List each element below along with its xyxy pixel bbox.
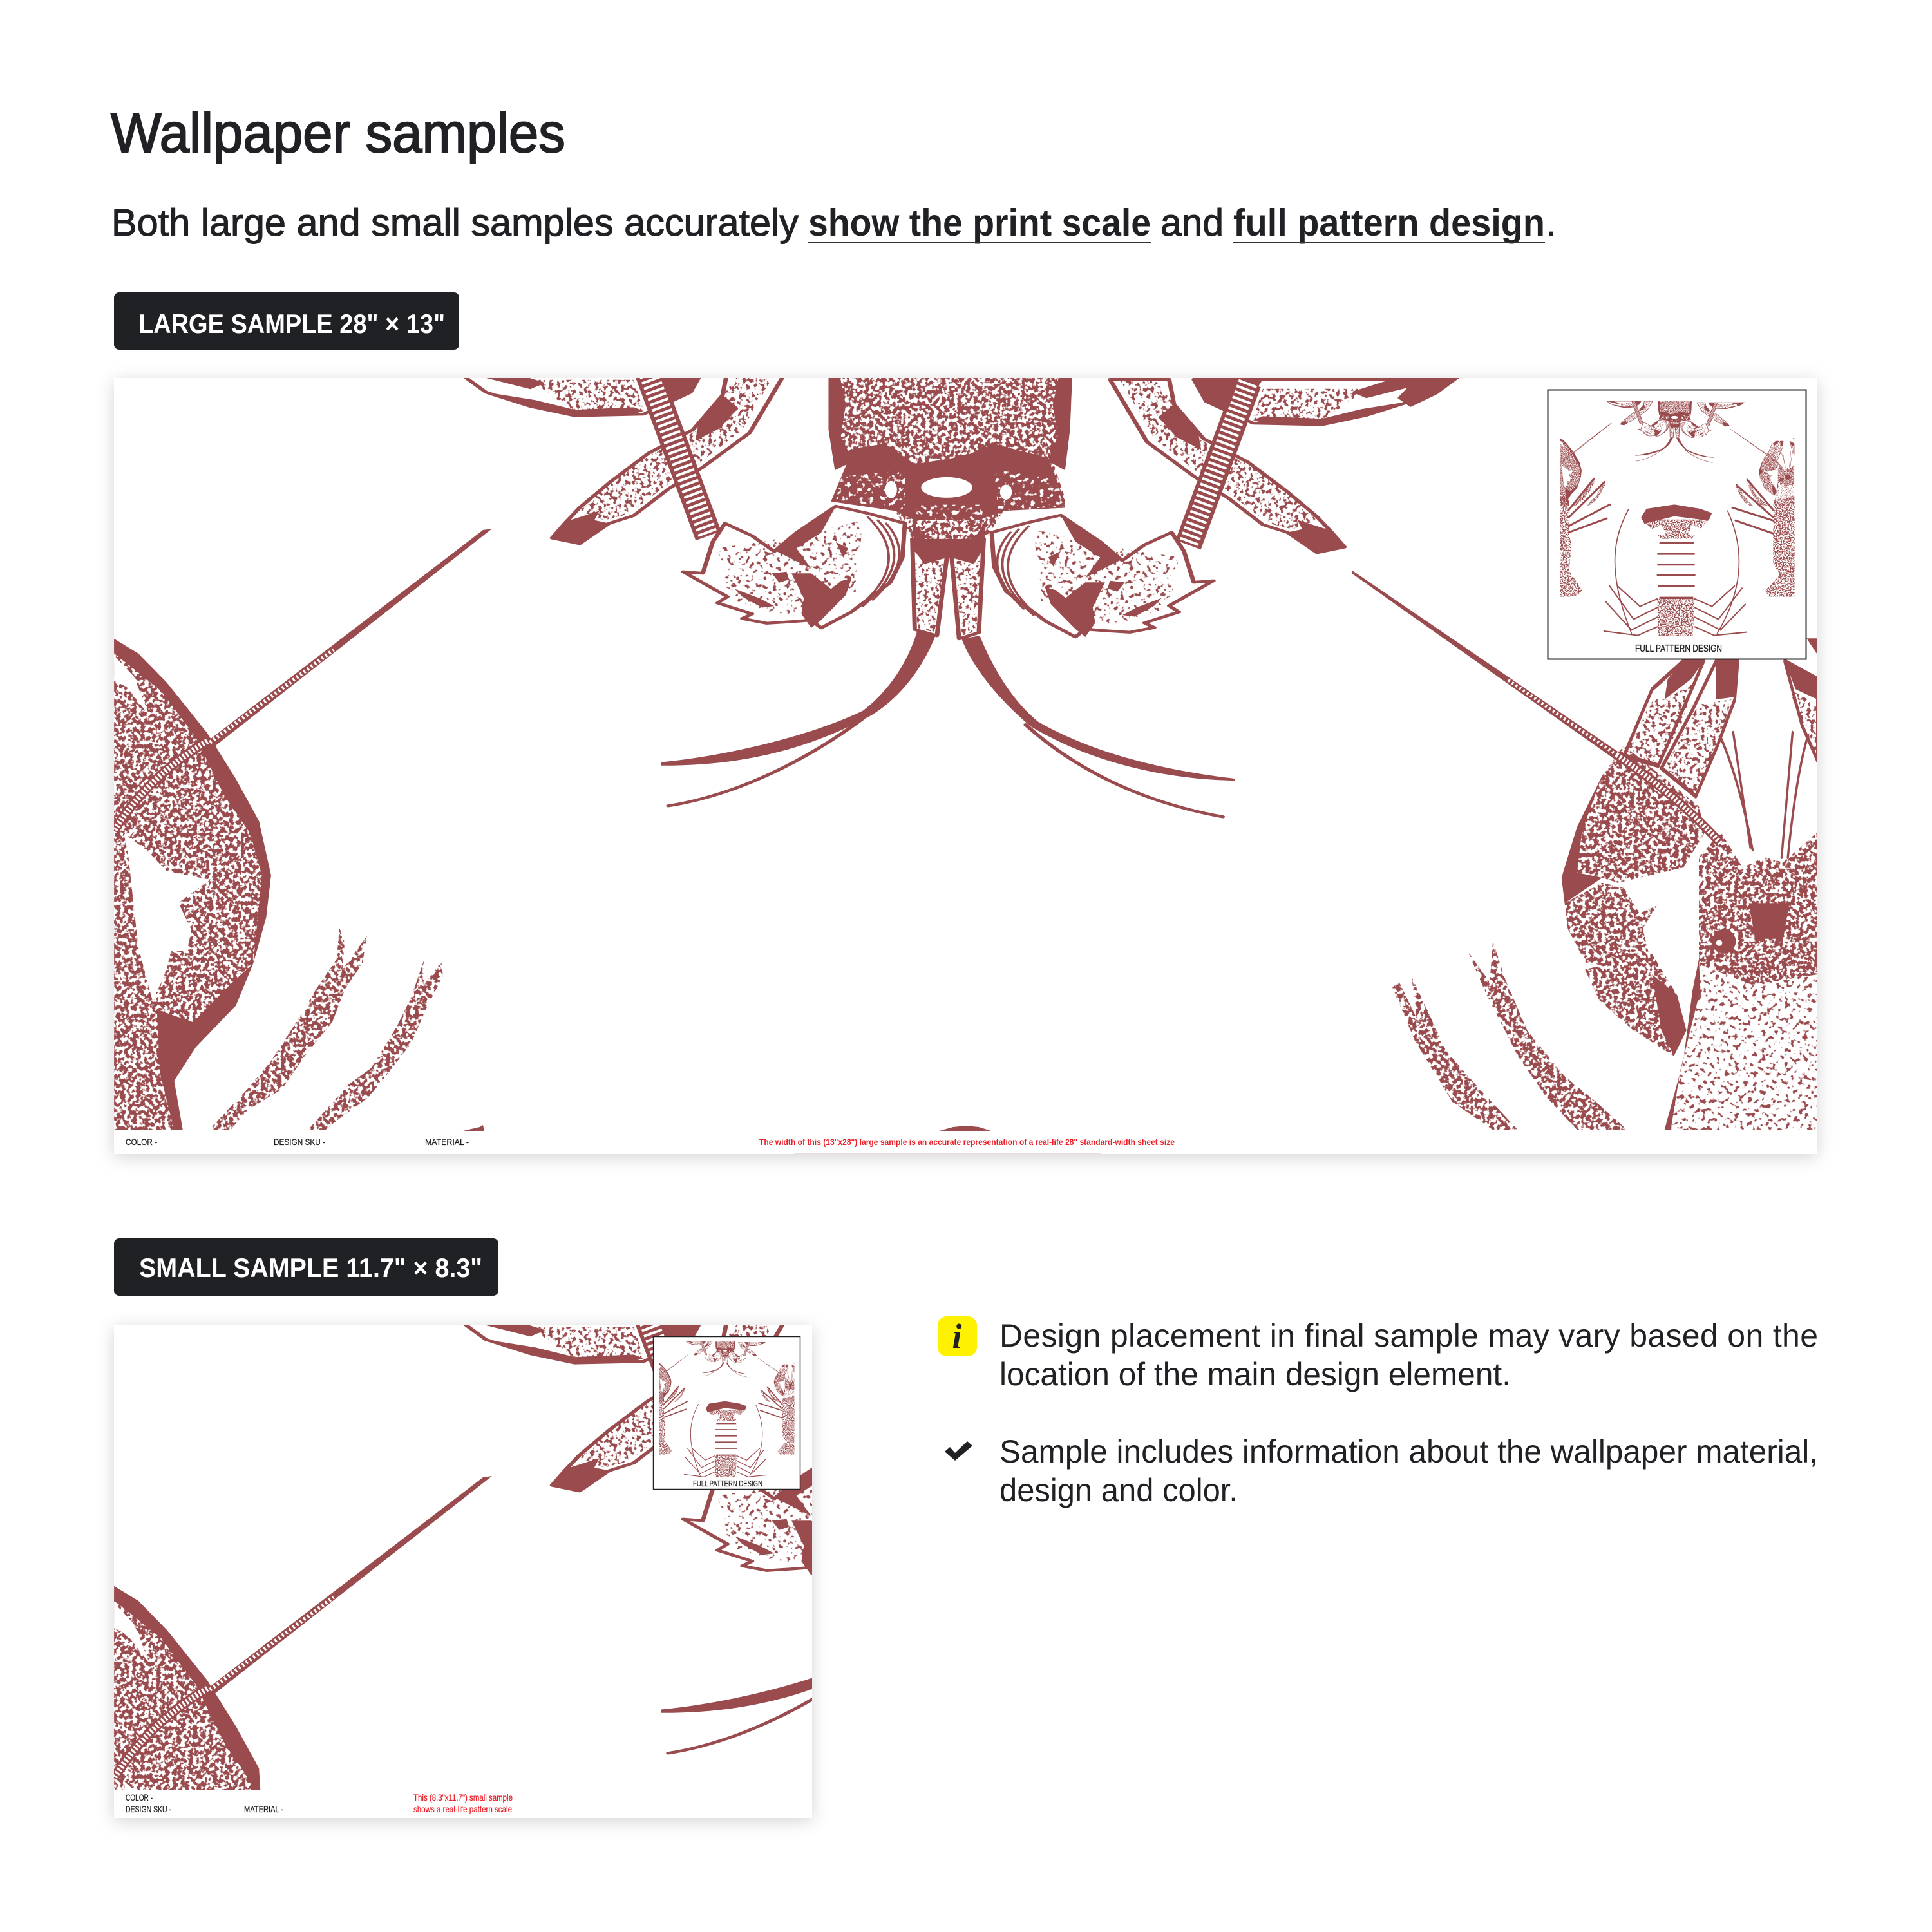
panel: large sample bbox=[114, 370, 1817, 1154]
right lobster claw finger texture bbox=[1627, 684, 1817, 796]
icon: yellow info badge: i bbox=[952, 1317, 962, 1356]
footer strip: small sample: COLOR - bbox=[126, 1792, 153, 1803]
text block: sample information note bbox=[999, 1434, 1818, 1508]
inset caption: FULL PATTERN DESIGN bbox=[1635, 643, 1722, 654]
footer strip: small sample: DESIGN SKU - bbox=[126, 1804, 171, 1814]
footer strip: large sample bbox=[114, 1131, 1817, 1154]
subtitle: Both large and small samples accurately bbox=[111, 202, 799, 244]
leg texture bbox=[530, 370, 777, 520]
hatched leg segment bbox=[649, 374, 708, 536]
text block: sample information note: design and color. bbox=[999, 1472, 1238, 1508]
subtitle: and bbox=[1160, 202, 1224, 244]
small pattern fragments at bottom edge bbox=[463, 1125, 993, 1132]
upper lobster right limbs, mirrored bbox=[992, 379, 1441, 637]
title: Wallpaper samples bbox=[111, 102, 565, 164]
footer strip: small sample: This (8.3"x11.7") small sample bbox=[413, 1792, 513, 1803]
inset pattern thumbnail bbox=[1560, 401, 1795, 636]
footer strip: large sample: COLOR - bbox=[126, 1137, 157, 1147]
right lobster texture bbox=[1392, 745, 1817, 1130]
inset: full pattern design bbox=[1548, 390, 1806, 659]
artwork: small sample crop bbox=[114, 1318, 1459, 1792]
badge: large sample: LARGE SAMPLE 28" × 13" bbox=[138, 308, 445, 339]
subtitle: show the print scale bbox=[808, 202, 1151, 244]
left lobster antenna bbox=[114, 529, 492, 831]
upper lobster carapace texture bbox=[828, 370, 1072, 542]
left claw crop bbox=[114, 1586, 260, 1792]
badge: small sample bbox=[114, 1238, 498, 1296]
inset: small full pattern design bbox=[653, 1337, 800, 1489]
text block: design placement note: location of the main design element. bbox=[999, 1356, 1511, 1392]
subtitle: . bbox=[1546, 202, 1556, 244]
text block: sample information note: Sample includes information about the wallpaper material, bbox=[999, 1434, 1818, 1470]
column texture bbox=[914, 561, 981, 636]
right leg tip of upper lobster bbox=[1397, 378, 1459, 407]
badge: large sample bbox=[114, 292, 459, 350]
footer strip: large sample: The width of this (13"x28") large sample is an accurate representation of a real-life 28" standard-width sheet size bbox=[759, 1137, 1175, 1147]
subtitle bbox=[111, 202, 1556, 244]
head highlights bbox=[836, 470, 1065, 520]
text block: design placement note: Design placement in final sample may vary based on the bbox=[999, 1318, 1818, 1354]
footer strip: large sample: DESIGN SKU - bbox=[274, 1137, 325, 1147]
icon: check mark bbox=[945, 1441, 972, 1461]
inset: small full pattern design: FULL PATTERN DESIGN bbox=[693, 1479, 762, 1488]
mottled legs of upper lobster bbox=[456, 370, 786, 544]
icon: yellow info badge bbox=[938, 1316, 977, 1356]
claw bbox=[683, 506, 905, 628]
right lobster solid outlines and antennules bbox=[1562, 638, 1817, 1130]
badge: small sample: SMALL SAMPLE 11.7" × 8.3" bbox=[139, 1253, 482, 1283]
footer strip: small sample: shows a real-life pattern scale bbox=[413, 1804, 512, 1814]
panel: small sample bbox=[114, 1318, 1459, 1818]
right lobster carapace speckle bbox=[1665, 949, 1817, 1130]
artwork: crayfish pattern at print scale bbox=[114, 370, 1817, 1132]
upper lobster head details bbox=[828, 370, 1072, 520]
left lobster claw and body bbox=[114, 639, 271, 1130]
eye gap and columns bbox=[885, 477, 1012, 639]
left lobster walking legs bbox=[209, 928, 443, 1130]
right lobster claw outline bbox=[1624, 661, 1817, 796]
right lobster antenna bbox=[1352, 571, 1721, 844]
footer strip: large sample: MATERIAL - bbox=[425, 1137, 469, 1147]
upper lobster antennae bbox=[661, 631, 1235, 817]
text block: design placement note bbox=[999, 1318, 1818, 1392]
subtitle: full pattern design bbox=[1233, 202, 1545, 244]
footer strip: small sample bbox=[126, 1792, 513, 1814]
footer strip: small sample: MATERIAL - bbox=[244, 1804, 283, 1814]
